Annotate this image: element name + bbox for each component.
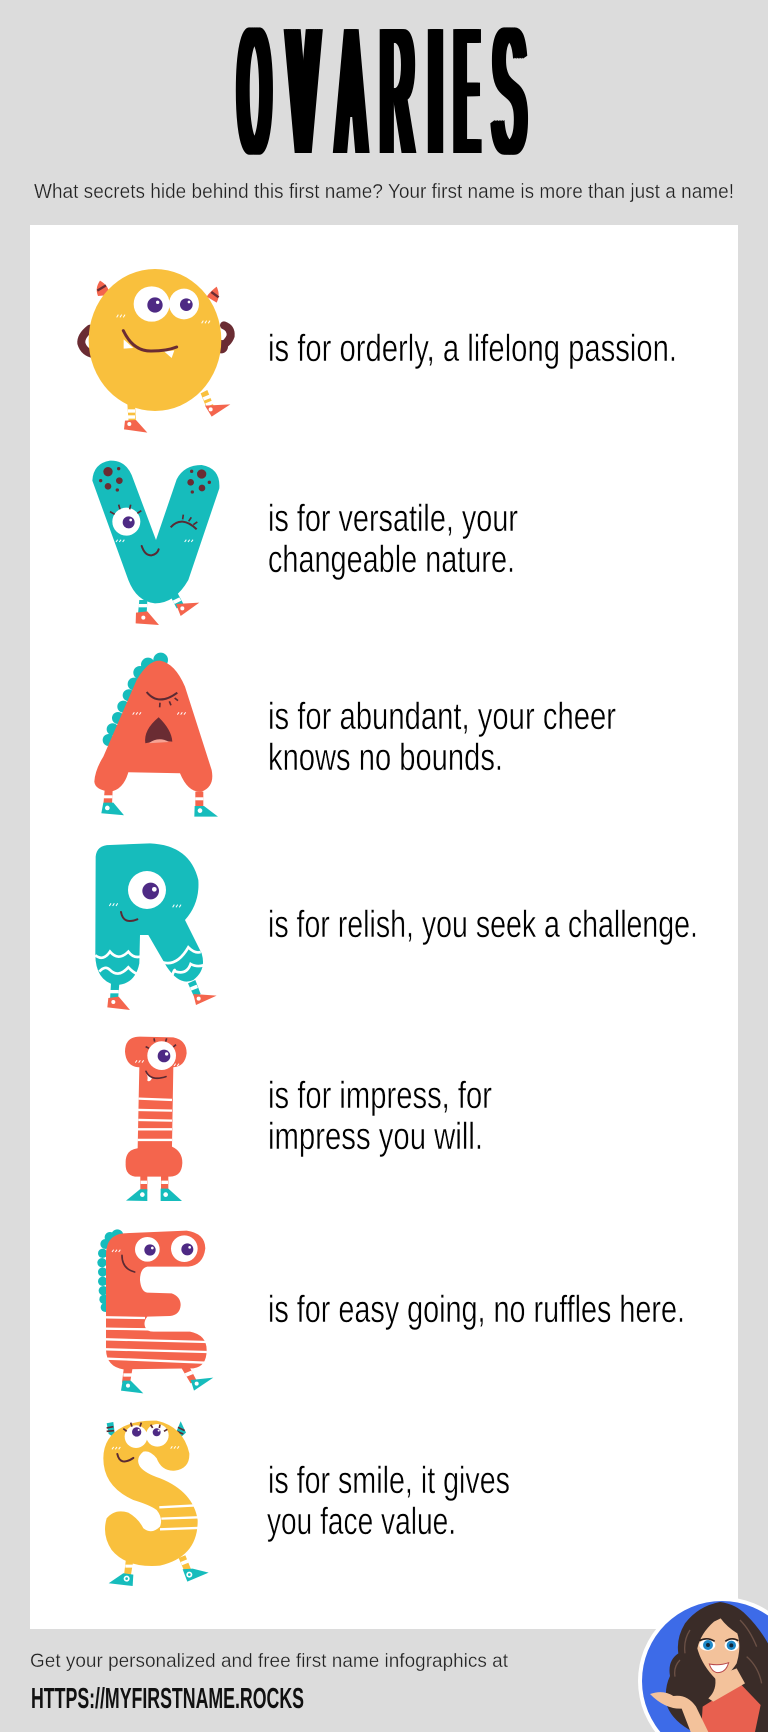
icon: A monster (94, 653, 218, 817)
text: I line 2: impress you will. (268, 1116, 483, 1158)
icon: S monster (103, 1421, 209, 1586)
footer url: HTTPS://MYFIRSTNAME.ROCKS (31, 1683, 304, 1715)
icon: R monster (95, 843, 217, 1010)
text: A line 2: knows no bounds. (268, 737, 503, 779)
subtitle: What secrets hide behind this first name? Your first name is more than just a name! (34, 181, 734, 203)
text: V: is for versatile, your (268, 498, 518, 540)
footer text: Get your personalized and free first name infographics at (30, 1651, 509, 1672)
icon: I monster (125, 1037, 187, 1201)
icon: O monster (81, 269, 231, 433)
icon: V monster (92, 461, 219, 625)
text: S: is for smile, it gives (268, 1460, 510, 1502)
text: V line 2: changeable nature. (268, 539, 515, 581)
panel: white card (30, 225, 738, 1629)
text: A: is for abundant, your cheer (268, 696, 616, 738)
avatar: woman in blue circle (638, 1597, 768, 1732)
icon: E monster (97, 1229, 213, 1393)
text: I: is for impress, for (268, 1075, 492, 1117)
text: S line 2: you face value. (267, 1501, 456, 1543)
title (236, 0, 528, 192)
